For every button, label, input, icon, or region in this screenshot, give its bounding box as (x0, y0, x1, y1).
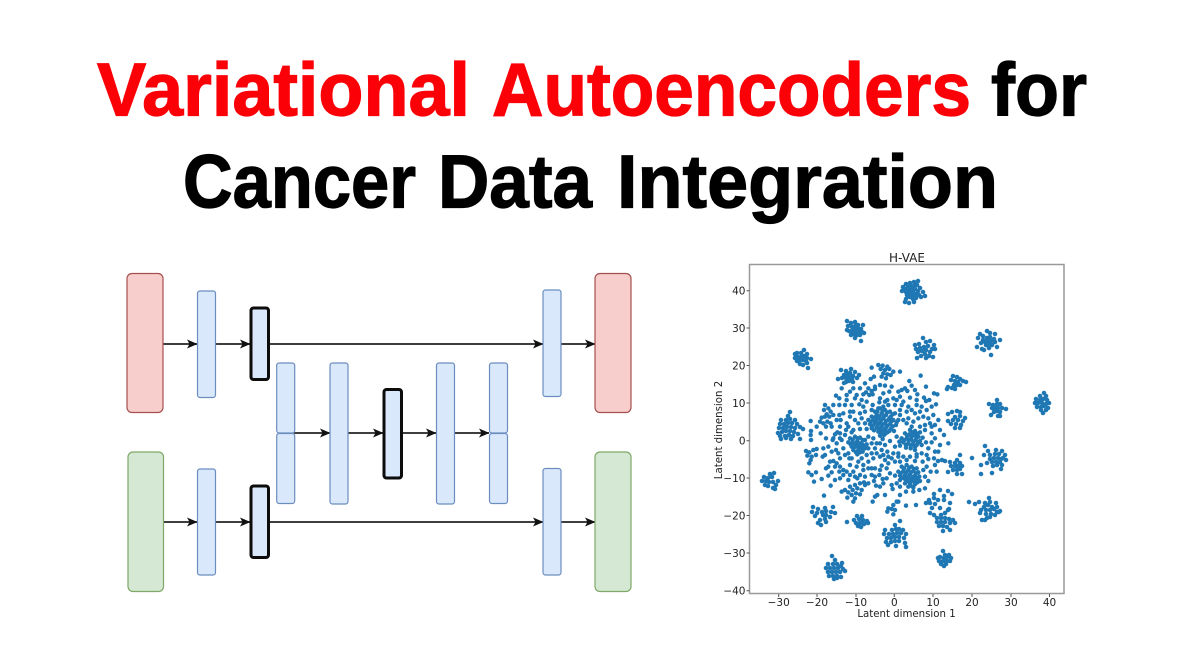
cluster 855,329 (847, 321, 864, 341)
x axis labels (768, 597, 1056, 609)
y axis labels: −20 (723, 510, 746, 522)
input block: red (127, 274, 163, 412)
diagram: autoencoder architecture (127, 274, 631, 592)
cluster 988,341 (977, 331, 1000, 355)
latent layers: bold outline (251, 308, 402, 558)
cluster 994,459 (972, 446, 1006, 474)
scatter points (762, 281, 1049, 579)
cluster 1042,403 (1035, 393, 1049, 413)
cluster 834,570 (826, 556, 845, 579)
y axis labels: −40 (723, 586, 746, 598)
cluster 895,537 (884, 521, 906, 547)
central mass of points (806, 365, 948, 514)
cluster 924,349 (915, 338, 935, 358)
y axis labels: 40 (732, 286, 746, 298)
encoder layers (198, 291, 348, 575)
y axis labels: −10 (723, 473, 746, 485)
x axis label: Latent dimension 1 (857, 609, 956, 620)
x axis labels: 30 (1004, 597, 1018, 609)
title (97, 48, 1087, 224)
y axis label: Latent dimension 2 (714, 381, 725, 479)
x axis labels: 0 (891, 597, 898, 609)
x axis labels: 40 (1043, 597, 1056, 609)
y axis labels: 30 (732, 323, 746, 335)
cluster 997,407 (989, 400, 1006, 416)
input block: green (128, 452, 164, 592)
decoder layers (436, 290, 561, 575)
title: Autoencoders (492, 48, 971, 132)
cluster 945,557 (938, 551, 951, 566)
y axis labels: 10 (732, 398, 746, 410)
cluster 955,381 (947, 376, 966, 389)
cluster 848,376 (838, 369, 859, 383)
output block: green (595, 452, 631, 592)
x axis labels: 20 (965, 597, 979, 609)
title: Cancer (183, 140, 416, 224)
cluster top-left 789,428 (778, 412, 811, 440)
cluster 769,479 (762, 473, 778, 489)
title: for (991, 48, 1087, 132)
scatter plot: H-VAE (714, 251, 1064, 620)
output block: red (595, 274, 631, 412)
cluster 820,510 (812, 507, 835, 525)
y axis labels: −30 (723, 548, 746, 560)
y axis labels: 20 (732, 360, 746, 372)
x axis labels: −20 (806, 597, 828, 609)
title: Data (438, 140, 593, 224)
axis ticks (746, 291, 1050, 597)
x axis labels: −10 (845, 597, 867, 609)
x axis labels: 10 (926, 597, 940, 609)
title: Integration (617, 140, 998, 224)
cluster 801,358 (795, 350, 811, 368)
arrows: connections (163, 344, 595, 522)
cluster 958,421 (948, 411, 965, 428)
plot frame (750, 264, 1064, 594)
y axis labels: 0 (739, 436, 746, 448)
title: Variational (97, 48, 470, 132)
cluster 955,467 (938, 455, 962, 474)
cluster 860,520 (847, 516, 868, 527)
cluster 990,505 (969, 498, 1000, 520)
cluster top (902, 281, 925, 303)
cluster 945,520 (926, 490, 955, 531)
x axis labels: −30 (768, 597, 790, 609)
plot title: H-VAE (889, 251, 925, 265)
y axis labels (723, 286, 746, 598)
